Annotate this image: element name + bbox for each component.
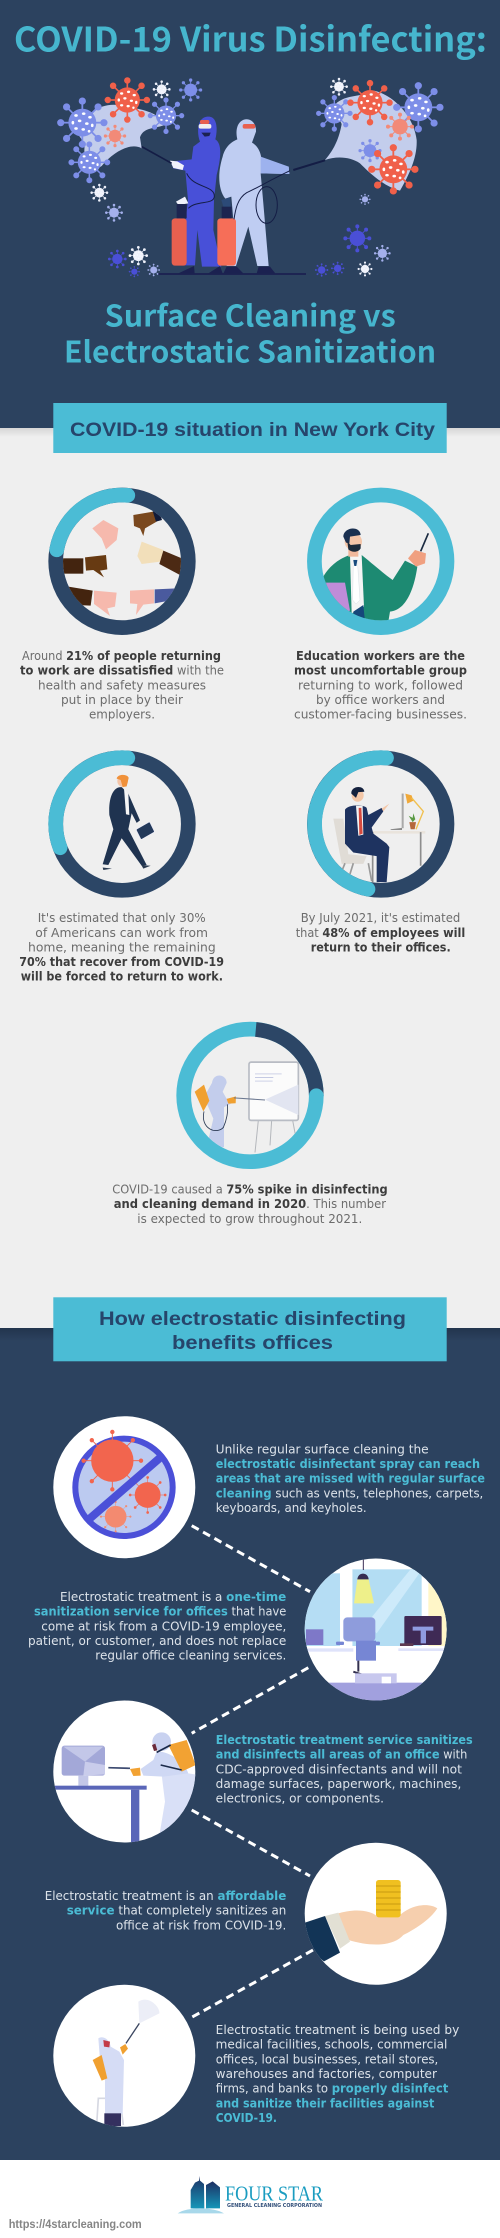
section heading: How electrostatic disinfecting benefits offices: How electrostatic disinfecting [99, 1309, 406, 1330]
text [45, 1889, 286, 1932]
text: COVID-19 caused a 75% spike in disinfecting [112, 1183, 388, 1197]
icon: no virus sign [53, 1416, 195, 1558]
ring chart full [314, 495, 447, 628]
footer logo: Four Star General Cleaning Corporation [178, 2176, 323, 2213]
text: that 48% of employees will [296, 926, 465, 940]
stat: 75% spike [112, 1029, 388, 1226]
text: of Americans can work from [35, 926, 208, 940]
right spray cloud [325, 91, 417, 191]
text: most uncomfortable group [294, 664, 467, 678]
text: electronics, or components. [216, 1792, 384, 1806]
text: by office workers and [316, 693, 445, 707]
stat: 70% forced to return [19, 758, 224, 984]
subtitle [64, 294, 436, 372]
benefit 5: used by many facilities [53, 1985, 459, 2127]
text: It's estimated that only 30% [38, 911, 206, 925]
text: COVID-19. [216, 2111, 277, 2125]
left virus cluster [58, 78, 202, 277]
light panel top shading [0, 428, 500, 437]
icon: buildings [178, 2176, 224, 2213]
text: home, meaning the remaining [28, 940, 216, 954]
benefit 2: one-time service [28, 1558, 448, 1703]
benefit 3: sanitizes all areas [53, 1700, 473, 1843]
text: is expected to grow throughout 2021. [137, 1212, 362, 1226]
text: customer-facing businesses. [294, 708, 467, 722]
ring chart 30% [56, 758, 188, 890]
ring chart 21% [56, 495, 188, 628]
text: Education workers are the [296, 649, 465, 663]
ground line [158, 271, 306, 276]
section heading: How electrostatic disinfecting benefits offices [53, 1297, 447, 1361]
text: cleaning such as vents, telephones, carpets, [216, 1486, 483, 1500]
text [294, 649, 467, 722]
text: and sanitize their facilities against [216, 2096, 435, 2110]
light panel background [0, 428, 500, 1328]
text: CDC-approved disinfectants and will not [216, 1762, 462, 1776]
right orange tank [217, 207, 236, 266]
text [20, 649, 224, 722]
text: and disinfects all areas of an office with [216, 1748, 467, 1762]
text: Around 21% of people returning [22, 649, 221, 663]
text: keyboards, and keyholes. [216, 1501, 367, 1515]
section heading: COVID-19 situation in New York City: COVID-19 situation in New York City [70, 420, 435, 441]
text: office at risk from COVID-19. [116, 1918, 286, 1932]
benefit 4: affordable service [45, 1843, 447, 1985]
text: come at risk from a COVID-19 employee, [41, 1619, 286, 1633]
text [216, 1733, 473, 1806]
icon: office interior [303, 1558, 448, 1703]
text: returning to work, followed [298, 678, 463, 692]
text: service that completely sanitizes an [67, 1904, 286, 1918]
text [216, 1442, 485, 1515]
text: Electrostatic treatment is an affordable [45, 1889, 286, 1903]
icon: worker spraying computer [53, 1700, 198, 1843]
right virus cluster [315, 78, 443, 276]
text [296, 911, 465, 954]
text [216, 2023, 459, 2125]
text: warehouses and factories, computer [216, 2067, 437, 2081]
text: to work are dissatisfied with the [20, 664, 224, 678]
icon: office worker at desk [333, 787, 425, 882]
section heading: COVID-19 situation in New York City [53, 403, 447, 453]
text [19, 911, 224, 984]
dark panel background [0, 1328, 500, 2160]
hoses and lances [142, 147, 325, 223]
stat: education workers [294, 495, 467, 722]
text: regular office cleaning services. [95, 1649, 286, 1663]
text: Electrostatic treatment service sanitizes [216, 1733, 473, 1747]
ring chart 75% [184, 1029, 316, 1162]
text: Unlike regular surface cleaning the [216, 1442, 429, 1456]
text: damage surfaces, paperwork, machines, [216, 1777, 461, 1791]
text: put in place by their [61, 693, 183, 707]
icon: thumbs down hands [62, 511, 182, 616]
ring chart 48% [314, 758, 447, 890]
text: electrostatic disinfectant spray can reach [216, 1457, 480, 1471]
left worker [170, 117, 223, 273]
text: 70% that recover from COVID-19 [19, 955, 224, 969]
text [112, 1183, 388, 1226]
title: COVID-19 Virus Disinfecting: [14, 12, 487, 62]
subtitle: Electrostatic Sanitization [64, 330, 436, 372]
icon: worker spraying upward on ladder [53, 1985, 195, 2127]
logo tagline: GENERAL CLEANING CORPORATION [227, 2203, 322, 2209]
text: Electrostatic treatment is being used by [216, 2023, 459, 2037]
stat: 21% dissatisfied [20, 495, 224, 722]
text: offices, local businesses, retail stores, [216, 2052, 438, 2066]
text: patient, or customer, and does not replace [28, 1634, 286, 1648]
section heading: How electrostatic disinfecting benefits offices: benefits offices [172, 1333, 333, 1354]
text: firms, and banks to properly disinfect [216, 2082, 449, 2096]
text: areas that are missed with regular surface [216, 1472, 485, 1486]
text [28, 1590, 286, 1663]
icon: worker spraying whiteboard [195, 1062, 298, 1152]
footer background [0, 2160, 500, 2238]
icon: hand holding coins [305, 1843, 447, 1985]
dark panel top shading [0, 1328, 500, 1341]
header background [0, 0, 500, 428]
text: employers. [89, 708, 155, 722]
hero illustration: disinfecting workers [58, 78, 443, 277]
text: return to their offices. [311, 940, 451, 954]
text: and cleaning demand in 2020. This number [114, 1197, 386, 1211]
dashed connectors [192, 1526, 313, 2017]
text: By July 2021, it's estimated [301, 911, 460, 925]
left spray cloud [77, 105, 167, 168]
text: sanitization service for offices that have [34, 1605, 286, 1619]
right worker [219, 119, 289, 273]
icon: walking businessman [103, 775, 155, 870]
website url: https://4starcleaning.com [9, 2217, 142, 2231]
benefit 1: reaches missed areas [53, 1416, 485, 1558]
subtitle: Surface Cleaning vs [105, 294, 396, 336]
text: Electrostatic treatment is a one-time [60, 1590, 286, 1604]
text: health and safety measures [38, 678, 206, 692]
text: medical facilities, schools, commercial [216, 2038, 447, 2052]
text: will be forced to return to work. [21, 970, 223, 984]
stat: 48% return to offices [296, 758, 465, 954]
logo wordmark: FOUR STAR [225, 2182, 323, 2206]
left orange tank [172, 204, 187, 266]
icon: teacher [323, 529, 428, 622]
